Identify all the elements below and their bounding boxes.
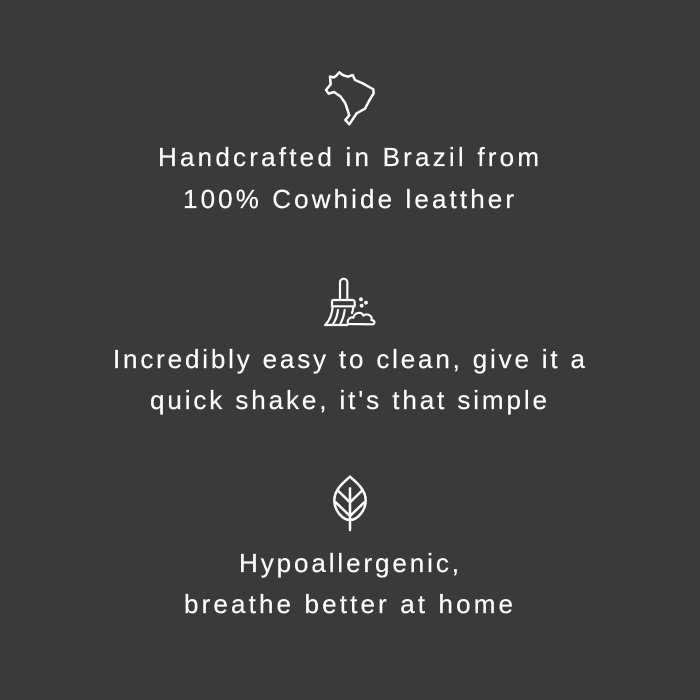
text: Brazil cowhide: 100% Cowhide leatther: [183, 184, 514, 214]
icon: broom and dust: [325, 279, 374, 325]
text: hypoallergenic: Hypoallergenic,: [239, 548, 459, 578]
text: hypoallergenic: [184, 548, 513, 619]
text: Brazil cowhide: Handcrafted in Brazil from: [158, 142, 539, 172]
icon: leaf: [334, 477, 366, 530]
text: hypoallergenic: breathe better at home: [184, 589, 513, 619]
text: easy to clean: quick shake, it's that simple: [150, 385, 547, 415]
icon: Brazil map: [326, 72, 374, 124]
text: easy to clean: [113, 344, 586, 415]
text: easy to clean: Incredibly easy to clean, give it a: [113, 344, 586, 374]
text: Brazil cowhide: [158, 142, 539, 214]
